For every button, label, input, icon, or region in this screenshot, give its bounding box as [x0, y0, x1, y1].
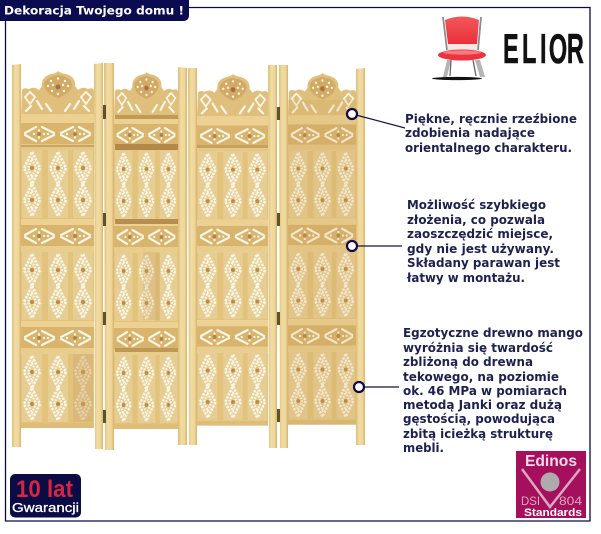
callout 3 text: Egzotyczne drewno mango	[403, 326, 583, 340]
callout 3 text: mebli.	[403, 441, 444, 455]
callout 1 text: Piękne, ręcznie rzeźbione	[405, 112, 577, 126]
title banner: Dekoracja Twojego domu !	[4, 4, 184, 18]
callout 3 text: metodą Janki oraz dużą	[403, 398, 562, 412]
warranty badge: Gwarancji	[12, 500, 79, 515]
warranty badge	[10, 474, 81, 518]
hinges	[103, 105, 280, 423]
callout 3 text: zbliżoną do drewna	[403, 355, 533, 369]
callout 3 leader and marker	[354, 382, 399, 392]
callout 2 text	[406, 198, 560, 285]
callout 3 text: ok. 46 MPa w pomiarach	[403, 384, 567, 398]
callout 2 text: złożenia, co pozwala	[407, 213, 545, 227]
screen panel 3	[197, 74, 268, 426]
screen panel 2	[114, 72, 178, 429]
folding screen photo	[12, 63, 365, 450]
certification badge: Edinos: Edinos	[525, 453, 577, 470]
callout 2 leader and marker	[347, 241, 402, 251]
callout 3 text: gęstością, powodująca	[403, 412, 555, 426]
title banner	[0, 0, 189, 21]
callout 3 text	[403, 326, 583, 455]
callout 2 text: łatwy w montażu.	[406, 271, 525, 285]
certification badge: Edinos	[516, 451, 586, 519]
warranty badge: 10 lat	[16, 476, 73, 503]
callout 3 text: tekowego, na poziomie	[403, 370, 559, 384]
certification badge: Edinos: 804	[559, 494, 582, 508]
callout 1 leader and marker	[347, 109, 405, 128]
callout 3 text: wyróżnia się twardość	[403, 341, 553, 355]
screen panel 1	[21, 71, 94, 428]
certification badge: Edinos: Standards	[524, 507, 582, 519]
callout 1 text: orientalnego charakteru.	[405, 141, 572, 155]
callout 2 text: Możliwość szybkiego	[407, 198, 546, 212]
logo: ELIOR wordmark: ELIOR	[503, 26, 584, 73]
certification badge: Edinos: DSI	[521, 494, 540, 508]
callout 2 text: zaoszczędzić miejsce,	[407, 227, 553, 241]
callout 2 text: Składany parawan jest	[407, 256, 560, 270]
callout 3 text: zbitą icieżką strukturę	[403, 427, 553, 441]
dark wood accents	[21, 100, 356, 425]
screen posts	[12, 63, 365, 450]
screen panel 4	[288, 73, 356, 425]
callout 2 text: gdy nie jest używany.	[407, 242, 554, 256]
callout 1 text	[405, 112, 577, 155]
callout 1 text: zdobienia nadające	[405, 126, 535, 140]
logo: chair icon	[432, 16, 486, 80]
